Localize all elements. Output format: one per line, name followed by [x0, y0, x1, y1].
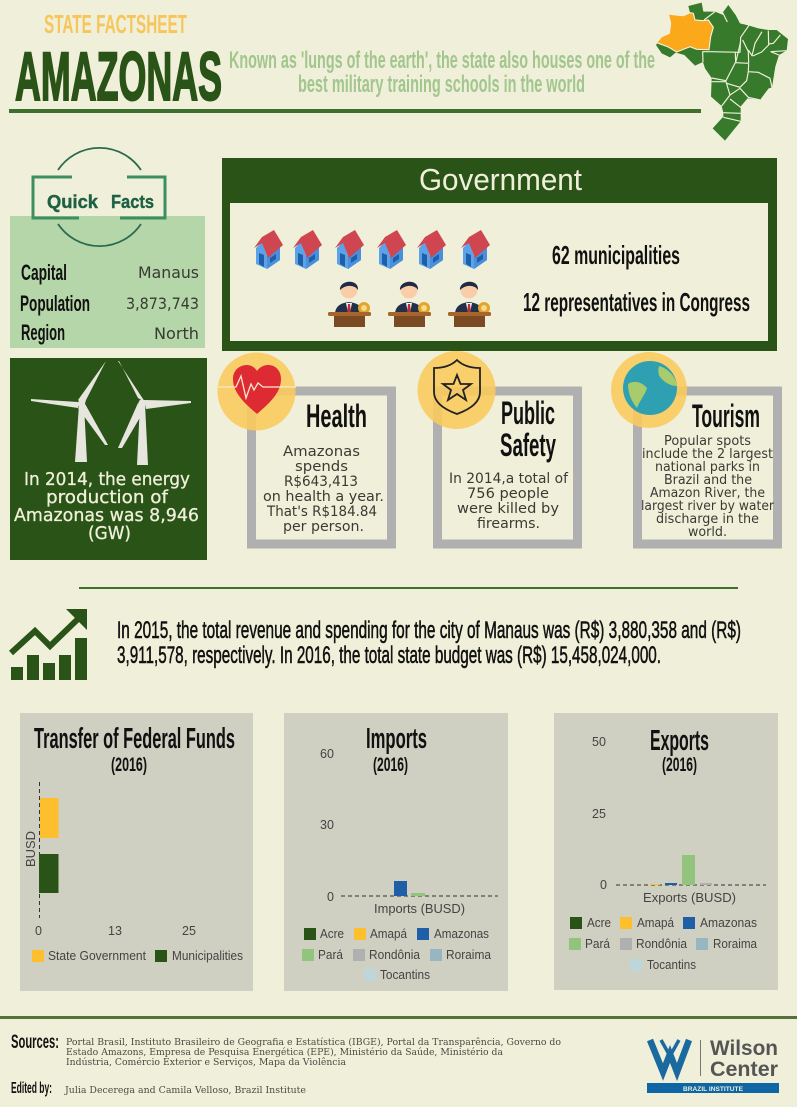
footer: sources: Sources:	[11, 1032, 59, 1053]
legend: Amazonas	[700, 916, 757, 930]
text: tourism: discharge in the	[656, 512, 759, 527]
footer: sources	[11, 1032, 561, 1068]
bar: Pará exports	[682, 855, 695, 885]
panel: quick facts	[10, 148, 205, 348]
bar: state government	[40, 798, 58, 838]
legend: Roraima	[446, 948, 491, 962]
text: tourism: largest river by water	[641, 499, 775, 514]
chart: transfer of federal funds	[20, 713, 253, 991]
panel: health	[218, 352, 392, 544]
chart title: Transfer of Federal Funds	[34, 723, 235, 755]
fact: capital	[21, 260, 199, 285]
icons: houses	[254, 230, 490, 269]
header: state factsheet label: STATE FACTSHEET	[44, 9, 187, 39]
chart title: Exports	[650, 725, 709, 757]
quick facts badge: Facts	[111, 192, 154, 212]
text: tourism	[641, 434, 775, 540]
axis ticks: 50	[592, 735, 606, 749]
footer: sources: Estado Amazons, Empresa de Pesquisa Energética (EPE), Ministério da Saúde, Ministério da	[66, 1047, 503, 1058]
axis label: BUSD	[24, 831, 38, 867]
footer: sources: Indústria, Comércio Exterior e Serviços, Mapa da Violência	[66, 1057, 346, 1068]
axis ticks: 60	[320, 747, 334, 761]
footer: editors: Julia Decerega and Camila Velloso, Brazil Institute	[64, 1085, 306, 1096]
energy text: production of	[46, 487, 169, 508]
legend: Acre	[320, 927, 344, 941]
text: public safety: In 2014,a total of	[449, 471, 569, 487]
chart title: (2016)	[662, 755, 697, 776]
bar: municipalities	[39, 854, 58, 893]
energy text: Amazonas was 8,946	[14, 505, 199, 526]
legend	[32, 949, 243, 963]
icon: wind turbines	[31, 361, 191, 465]
text: municipalities: 62 municipalities	[552, 240, 680, 270]
icon: shield on circle	[418, 351, 496, 429]
chart: imports	[284, 713, 508, 991]
text: tourism: include the 2 largest	[642, 447, 773, 462]
axis label: Imports (BUSD)	[374, 902, 465, 916]
energy text: In 2014, the energy	[24, 469, 190, 490]
footer: editors: Edited by:	[11, 1080, 52, 1097]
logo: Wilson Center	[647, 1037, 779, 1093]
logo: Wilson Center: BRAZIL INSTITUTE	[683, 1086, 744, 1093]
heading: public safety: Safety	[500, 427, 556, 463]
text: public safety: 756 people	[467, 486, 549, 502]
axis ticks: 13	[108, 924, 122, 938]
legend: Tocantins	[380, 968, 430, 982]
legend: Amapá	[370, 927, 407, 941]
energy text: (GW)	[88, 523, 131, 544]
legend: Rondônia	[636, 937, 687, 951]
chart title	[366, 723, 427, 776]
legend: Amapá	[637, 916, 674, 930]
legend: Acre	[587, 916, 611, 930]
text: budget	[117, 617, 741, 669]
quick facts badge	[33, 148, 165, 246]
bar: Pará imports	[411, 893, 425, 896]
fact: population: Population	[20, 291, 90, 316]
text: public safety	[449, 471, 569, 532]
icons: representatives	[328, 282, 491, 327]
panel: government	[222, 158, 777, 351]
legend	[302, 927, 491, 982]
axis ticks	[592, 735, 607, 892]
icon: heart on circle	[218, 352, 296, 430]
axis ticks	[35, 924, 196, 938]
chart title	[650, 725, 709, 776]
text: tourism: Popular spots	[664, 434, 751, 449]
heading: government: Government	[419, 162, 582, 197]
panel: tourism	[611, 352, 778, 544]
axis ticks: 0	[35, 924, 42, 938]
chart: exports	[554, 713, 778, 990]
title: Amazonas: AMAZONAS	[15, 38, 222, 115]
fact: region: North	[154, 324, 199, 343]
text: health: R$643,413	[284, 474, 358, 490]
legend: Pará	[585, 937, 610, 951]
heading: public safety: Public	[501, 395, 555, 431]
axis ticks: 30	[320, 818, 334, 832]
legend: Amazonas	[434, 927, 489, 941]
text: tourism: national parks in	[655, 460, 760, 475]
quick facts badge: Quick	[47, 192, 99, 212]
text: tourism: world.	[688, 525, 727, 540]
fact: region: Region	[21, 320, 65, 345]
fact: population	[20, 291, 199, 316]
legend: State Government	[48, 949, 146, 963]
chart title: (2016)	[373, 755, 408, 776]
chart title	[34, 723, 235, 776]
chart title: (2016)	[111, 755, 147, 776]
axis ticks	[320, 747, 334, 904]
header rule	[9, 109, 701, 113]
panel: energy	[10, 358, 207, 560]
legend: Roraima	[713, 937, 757, 951]
text: health: spends	[295, 459, 348, 475]
text: tourism: Amazon River, the	[650, 486, 765, 501]
logo: Wilson Center: Center	[710, 1058, 778, 1081]
fact: population: 3,873,743	[126, 294, 199, 313]
heading: health: Health	[306, 398, 367, 434]
energy text	[14, 469, 199, 544]
bar: Amazonas imports	[394, 881, 407, 896]
text: health	[263, 444, 384, 535]
legend: Tocantins	[647, 958, 696, 972]
text: tourism: Brazil and the	[664, 473, 752, 488]
fact: region	[21, 320, 199, 345]
text: health: on health a year.	[263, 489, 384, 505]
axis ticks: 25	[182, 924, 196, 938]
subtitle	[229, 47, 655, 98]
heading: public safety	[500, 395, 556, 463]
legend	[569, 916, 757, 972]
legend: Pará	[318, 948, 343, 962]
axis ticks: 25	[592, 807, 606, 821]
axis ticks: 0	[600, 878, 607, 892]
bars: Amapá, Amazonas and Rondônia exports	[650, 883, 712, 885]
text: health: per person.	[283, 519, 364, 535]
panel: public safety	[418, 351, 578, 544]
subtitle: best military training schools in the world	[298, 71, 585, 98]
map of Brazil with Amazonas highlighted	[656, 3, 788, 141]
footer: editors	[11, 1080, 306, 1097]
legend: Rondônia	[369, 948, 420, 962]
axis label: Exports (BUSD)	[643, 891, 736, 905]
footer: sources: Portal Brasil, Instituto Brasileiro de Geografia e Estatística (IBGE), Portal da Transparência, Governo do	[66, 1037, 561, 1048]
text: health: That's R$184.84	[266, 504, 377, 520]
icon: globe on circle	[611, 352, 687, 428]
text: health: Amazonas	[283, 444, 360, 460]
chart title: Imports	[366, 723, 427, 755]
text: public safety: firearms.	[477, 516, 540, 532]
icon: rising chart	[11, 609, 87, 680]
legend: Municipalities	[172, 949, 243, 963]
text: public safety: were killed by	[457, 501, 559, 517]
fact: capital: Manaus	[138, 263, 199, 282]
fact: capital: Capital	[21, 260, 67, 285]
quick facts background	[10, 216, 205, 348]
axis ticks: 0	[327, 890, 334, 904]
logo: Wilson Center: Wilson	[710, 1037, 778, 1060]
